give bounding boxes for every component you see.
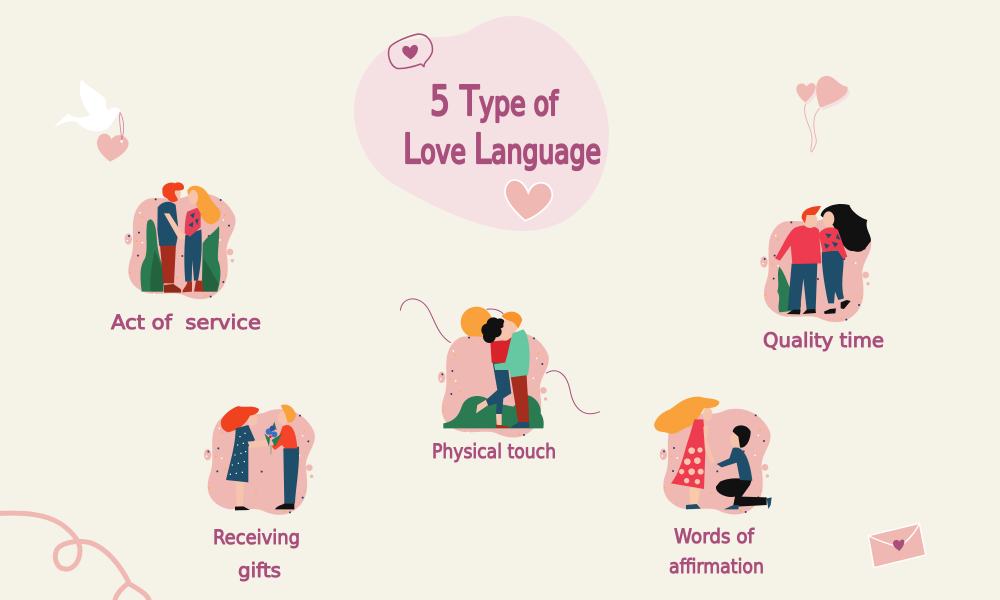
- icon: large heart: [505, 180, 552, 221]
- icon: love letter envelope: [868, 523, 926, 568]
- blob backdrop: [125, 193, 236, 299]
- woman: [221, 406, 270, 510]
- illustration: act of service couple: [125, 182, 236, 299]
- bushes: [443, 395, 544, 428]
- woman: [819, 204, 871, 314]
- blob backdrop: [760, 216, 871, 322]
- icon: white dove carrying heart: [54, 79, 129, 162]
- label: receiving gifts: [213, 526, 300, 582]
- label: act of service: Act of service: [111, 311, 261, 334]
- bouquet: [264, 422, 282, 454]
- decorative ribbon curl: [0, 513, 149, 600]
- title line 1: 5 Type of: [430, 77, 559, 125]
- woman: [476, 317, 513, 428]
- sun: [461, 307, 492, 338]
- blob backdrop: [660, 409, 771, 514]
- sun upper part over blob: [461, 307, 492, 337]
- label: physical touch: Physical touch: [432, 440, 556, 463]
- woman: [654, 397, 719, 509]
- plant: [777, 267, 801, 312]
- label: quality time: Quality time: [763, 329, 884, 352]
- illustration: words of affirmation couple: [654, 397, 772, 514]
- woman: [182, 186, 221, 292]
- illustration: physical touch couple: [400, 299, 600, 437]
- illustration: quality time couple: [760, 204, 871, 322]
- line: gifts: gifts: [238, 559, 281, 582]
- man: [716, 425, 772, 509]
- plants: [140, 219, 220, 292]
- icon: heart balloons: [796, 76, 850, 152]
- man: [494, 312, 530, 428]
- curved lines: [400, 299, 600, 414]
- title panel: pink blob with heading: [354, 16, 609, 231]
- man: [272, 404, 299, 509]
- man: [775, 206, 821, 314]
- man: [157, 182, 189, 293]
- icon: speech bubble with heart: [389, 34, 432, 69]
- title line 2: Love Language: [403, 125, 601, 173]
- line: Words of: Words of: [674, 525, 755, 548]
- blob backdrop: [204, 409, 315, 515]
- line: Receiving: Receiving: [213, 526, 300, 549]
- label: words of affirmation: [669, 525, 764, 578]
- blob backdrop: [438, 332, 549, 437]
- line: affirmation: affirmation: [669, 555, 764, 578]
- illustration: receiving gifts couple: [204, 404, 315, 515]
- title blob: [354, 16, 609, 231]
